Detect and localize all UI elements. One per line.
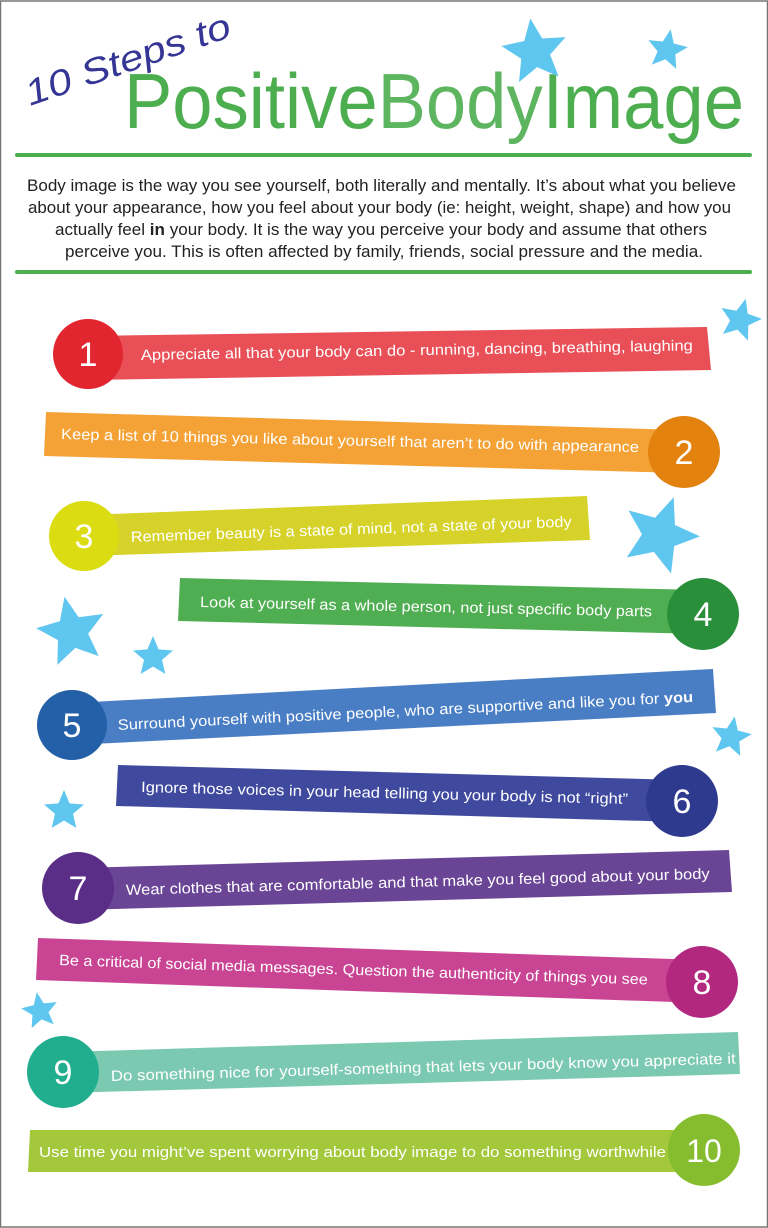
intro paragraph: actually feel in your body. It is the way you perceive your body and assume that others xyxy=(55,221,707,239)
step 9: Do something nice for yourself-something that lets your body know you appreciate it xyxy=(111,1051,737,1085)
step 4: Look at yourself as a whole person, not just specific body parts xyxy=(200,594,652,620)
step 6: Ignore those voices in your head telling you your body is not “right” xyxy=(141,779,628,808)
intro paragraph: Body image is the way you see yourself, both literally and mentally. It’s about what you believe xyxy=(27,177,736,195)
step 3: 3 xyxy=(75,518,93,556)
step 3: Remember beauty is a state of mind, not a state of your body xyxy=(131,514,572,546)
step 2: Keep a list of 10 things you like about yourself that aren’t to do with appearance xyxy=(61,426,639,456)
stars scattered xyxy=(19,293,766,1029)
step 9: 9 xyxy=(54,1054,72,1092)
step 6: 6 xyxy=(673,783,691,821)
step 1: Appreciate all that your body can do - running, dancing, breathing, laughing xyxy=(141,337,693,364)
title: 10 Steps to: 10 Steps to xyxy=(19,5,236,114)
stars top xyxy=(498,14,690,84)
step 2: 2 xyxy=(675,434,693,472)
step 4: 4 xyxy=(694,596,712,634)
step 9 xyxy=(27,1032,740,1108)
step 6 xyxy=(116,765,718,837)
intro paragraph xyxy=(27,177,736,261)
intro paragraph: perceive you. This is often affected by family, friends, social pressure and the media. xyxy=(65,243,703,261)
title: Positive Body Image: PositiveBodyImage xyxy=(124,57,744,145)
step 8 xyxy=(36,938,738,1018)
step 10: 10 xyxy=(686,1133,722,1169)
step 5: 5 xyxy=(63,707,81,745)
step 3 xyxy=(49,496,590,571)
step 4 xyxy=(178,578,739,650)
step 7: Wear clothes that are comfortable and that make you feel good about your body xyxy=(126,866,710,899)
step 2 xyxy=(44,412,720,488)
step 7 xyxy=(42,850,732,924)
step 10 xyxy=(28,1114,740,1186)
step 10: Use time you might’ve spent worrying about body image to do something worthwhile xyxy=(39,1144,666,1161)
step 1: 1 xyxy=(79,336,97,374)
step 1 xyxy=(53,319,711,389)
step 7: 7 xyxy=(69,870,87,908)
step 8: Be a critical of social media messages. Question the authenticity of things you see xyxy=(59,952,648,989)
intro paragraph: about your appearance, how you feel about your body (ie: height, weight, shape) and how you xyxy=(28,199,731,217)
step 5 xyxy=(37,669,716,760)
step 8: 8 xyxy=(693,964,711,1002)
step 5: Surround yourself with positive people, who are supportive and like you for you xyxy=(117,689,694,734)
